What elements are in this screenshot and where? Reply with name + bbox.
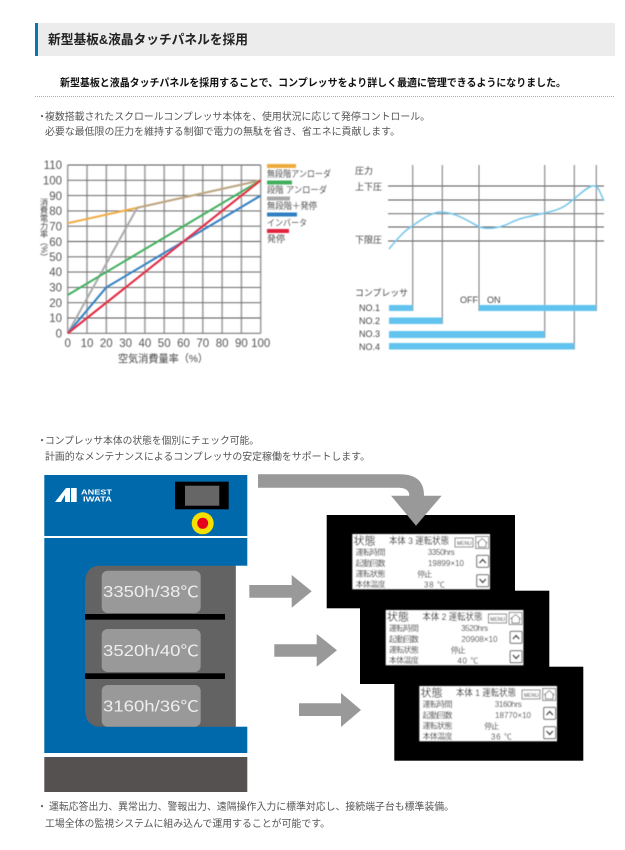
screen: unit 2 status: 3520hrs	[461, 624, 488, 633]
screen: unit 3 status: 3350hrs	[428, 548, 455, 557]
screen: unit 2 status: 起動回数	[389, 634, 419, 644]
title bar: 新型基板&液晶タッチパネルを採用	[48, 32, 248, 47]
screen: unit 2 status: 停止	[451, 645, 466, 655]
timing chart: pressure and compressor staging: 圧力	[355, 165, 373, 176]
text block: scroll compressor control: 必要な最低限の圧力を維持する制御で電力の無駄を省き、省エネに貢献します。	[45, 125, 400, 138]
lead text: 新型基板と液晶タッチパネルを採用することで、コンプレッサをより詳しく最適に管理できるようになりました。	[60, 76, 566, 89]
screen: unit 1 status: 本体温度	[422, 731, 452, 741]
timing chart: pressure and compressor staging: NO.3	[359, 329, 380, 339]
screen: unit 1 status	[419, 686, 557, 742]
line chart: power consumption vs air consumption: 60	[49, 237, 62, 249]
screen: unit 2 status: 運転状態	[389, 644, 419, 654]
compressor 1	[102, 685, 201, 727]
line chart: power consumption vs air consumption: 110	[44, 160, 62, 172]
screen: unit 2 status: 40 ℃	[457, 656, 478, 666]
text block: standard outputs and monitoring	[37, 800, 454, 830]
compressor 1: 3160h/36℃	[103, 698, 199, 716]
logo	[55, 488, 113, 504]
logo: IWATA	[83, 494, 113, 504]
line chart: power consumption vs air consumption: 40	[49, 267, 62, 279]
compressor 3	[102, 571, 201, 613]
chart legend: 無段階＋発停	[267, 200, 317, 211]
line chart: power consumption vs air consumption: 70	[196, 338, 209, 350]
compressor 2	[102, 629, 201, 672]
screen: unit 1 status: MENU	[524, 693, 539, 699]
screen: unit 1 status: 状態	[420, 686, 442, 700]
line chart: power consumption vs air consumption: 40	[139, 338, 151, 350]
screen: unit 3 status: 本体 3 運転状態	[389, 535, 449, 547]
timing chart: pressure and compressor staging: コンプレッサ	[355, 288, 408, 298]
arrow: curved to top panel	[258, 474, 442, 526]
chart legend: 発停	[267, 233, 285, 244]
chart legend: 無段階アンローダ	[267, 168, 331, 179]
screen: unit 3 status: 停止	[417, 569, 432, 579]
screen: unit 2 status: 20908×10	[461, 635, 498, 644]
timing chart: pressure and compressor staging: 下限圧	[355, 235, 382, 245]
compressor 3: 3350h/38℃	[103, 584, 199, 601]
timing chart: pressure and compressor staging: NO.4	[359, 342, 380, 352]
text block: individual status check: コンプレッサ本体の状態を個別にチェック可能。	[45, 434, 259, 447]
screen: unit 2 status: 本体温度	[389, 655, 419, 665]
line chart: power consumption vs air consumption: 30	[49, 282, 62, 294]
arrow: compressor 2	[274, 634, 337, 667]
compressor 2: 3520h/40℃	[103, 643, 199, 660]
line chart: power consumption vs air consumption	[40, 160, 270, 365]
timing chart: pressure and compressor staging: OFF	[460, 295, 478, 305]
screen: unit 3 status: 19899×10	[428, 559, 465, 568]
text block: standard outputs and monitoring: ・	[37, 802, 47, 813]
line chart: power consumption vs air consumption: 90	[235, 338, 248, 350]
line chart: power consumption vs air consumption: 20	[100, 338, 113, 350]
chart legend: 段階 アンローダ	[267, 184, 327, 195]
text block: scroll compressor control: 複数搭載されたスクロールコンプレッサ本体を、使用状況に応じて発停コントロール。	[45, 110, 430, 123]
screen: unit 3 status: 起動回数	[356, 558, 386, 568]
arrow: compressor 1	[299, 693, 361, 727]
screen: unit 3 status: 運転時間	[356, 547, 386, 557]
screen: unit 3 status: 状態	[354, 534, 376, 548]
timing chart: pressure and compressor staging: 上下圧	[355, 182, 382, 192]
line chart: power consumption vs air consumption: 20	[49, 298, 62, 310]
screen: unit 3 status	[352, 534, 490, 590]
screen: unit 2 status: MENU	[490, 617, 506, 623]
line chart: power consumption vs air consumption: 90	[49, 191, 62, 203]
chart legend	[267, 164, 331, 244]
line chart: power consumption vs air consumption: 80	[49, 206, 62, 218]
line chart: power consumption vs air consumption: 100	[43, 176, 62, 188]
screen: unit 1 status: 18770×10	[495, 711, 532, 720]
screen: unit 1 status: 3160hrs	[495, 700, 522, 709]
timing chart: pressure and compressor staging: ON	[487, 295, 500, 305]
timing chart: pressure and compressor staging	[355, 165, 604, 352]
screen: unit 1 status: 運転状態	[422, 720, 452, 730]
compressor unit illustration	[44, 475, 248, 792]
black panel backs	[327, 515, 583, 761]
screen: unit 2 status: 状態	[387, 610, 409, 624]
line chart: power consumption vs air consumption: 空気消費量率（%）	[118, 352, 208, 365]
line chart: power consumption vs air consumption: 50	[158, 338, 171, 350]
chart legend: インバータ	[267, 218, 307, 228]
logo: ANEST	[81, 488, 113, 496]
screen: unit 2 status: 本体 2 運転状態	[422, 611, 483, 623]
text block: scroll compressor control: ・	[37, 112, 47, 123]
text block: individual status check: 計画的なメンテナンスによるコンプレッサの安定稼働をサポートします。	[45, 450, 370, 463]
screen: unit 1 status: 運転時間	[422, 699, 452, 709]
control display	[175, 482, 229, 509]
timing chart: pressure and compressor staging: NO.1	[359, 303, 380, 313]
screen: unit 1 status: 起動回数	[422, 710, 452, 720]
screen: unit 3 status: 38 ℃	[424, 580, 445, 590]
line chart: power consumption vs air consumption: 70	[49, 222, 62, 234]
screen: unit 3 status: MENU	[457, 541, 472, 547]
line chart: power consumption vs air consumption: 100	[251, 338, 270, 350]
text block: individual status check: ・	[37, 436, 47, 447]
screen: unit 3 status: 運転状態	[356, 568, 386, 578]
line chart: power consumption vs air consumption: 30	[119, 338, 132, 350]
line chart: power consumption vs air consumption: 50	[49, 252, 62, 264]
screen: unit 1 status: 本体 1 運転状態	[456, 687, 516, 699]
arrow: compressor 3	[249, 575, 312, 608]
text block: standard outputs and monitoring: 運転応答出力、異常出力、警報出力、遠隔操作入力に標準対応し、接続端子台も標準装備。	[49, 800, 454, 813]
screen: unit 2 status	[386, 610, 523, 666]
screen: unit 1 status: 停止	[484, 721, 499, 731]
text block: standard outputs and monitoring: 工場全体の監視システムに組み込んで運用することが可能です。	[45, 817, 330, 830]
line chart: power consumption vs air consumption: 60	[177, 338, 190, 350]
line chart: power consumption vs air consumption: 0	[64, 338, 71, 350]
text block: scroll compressor control	[37, 110, 430, 138]
screen: unit 3 status: 本体温度	[356, 579, 386, 589]
screen: unit 2 status: 運転時間	[389, 623, 419, 633]
title bar	[35, 23, 615, 56]
timing chart: pressure and compressor staging: NO.2	[359, 316, 380, 326]
screen: unit 1 status: 36 ℃	[491, 732, 512, 742]
text block: individual status check	[37, 434, 370, 463]
line chart: power consumption vs air consumption: 0	[56, 328, 62, 340]
line chart: power consumption vs air consumption: 10	[81, 338, 93, 350]
line chart: power consumption vs air consumption: 80	[216, 338, 228, 350]
emergency stop	[192, 512, 214, 534]
line chart: power consumption vs air consumption: 10	[49, 313, 62, 325]
line chart: power consumption vs air consumption: 消費電力率（%）	[40, 197, 48, 261]
